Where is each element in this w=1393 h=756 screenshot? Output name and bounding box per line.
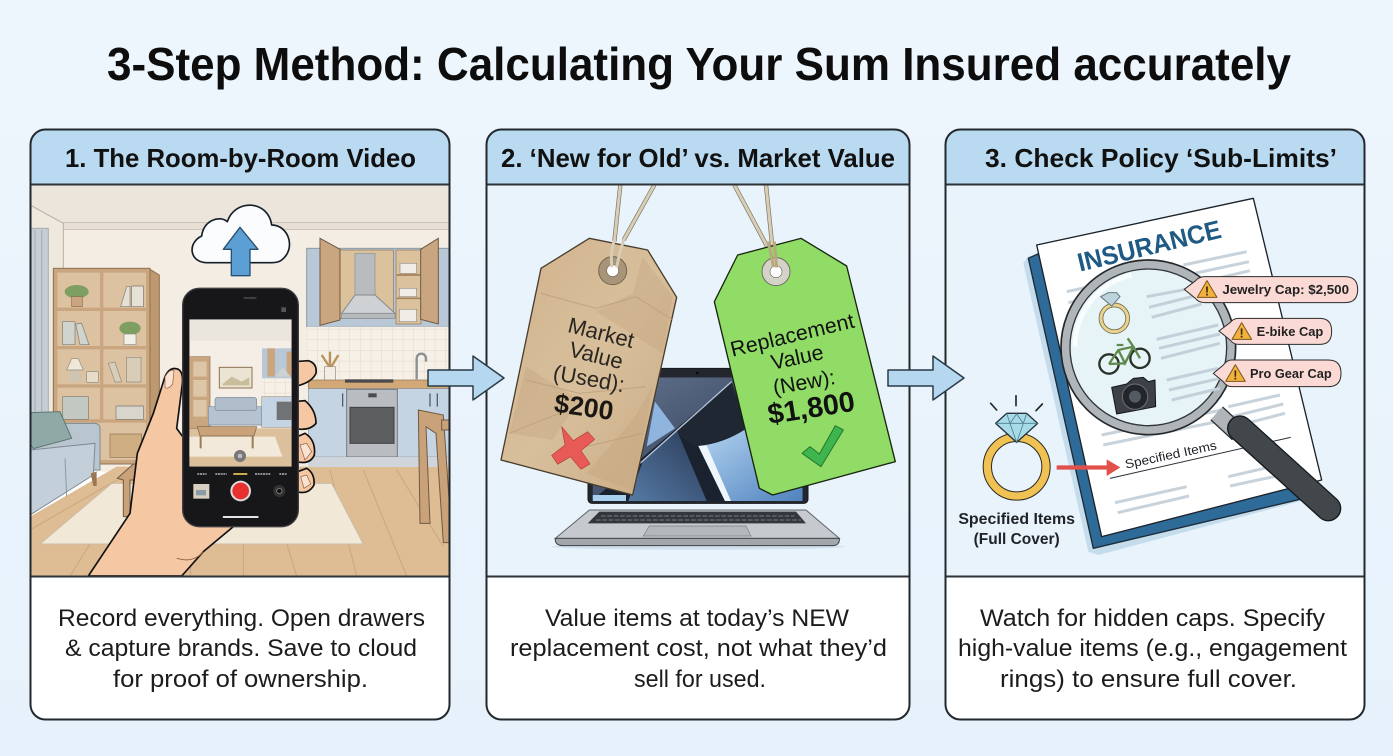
tag text: replacement value: Value bbox=[769, 340, 826, 375]
callout: pro gear cap: Pro Gear Cap bbox=[1250, 366, 1332, 381]
dining chair bbox=[418, 410, 450, 543]
icon: green check bbox=[802, 426, 843, 467]
body text: step 2: replacement cost, not what they’d bbox=[510, 635, 887, 662]
replacement value tag bbox=[714, 238, 895, 495]
record button bbox=[230, 481, 251, 501]
tag text: market value bbox=[551, 312, 637, 426]
bookshelf bbox=[53, 268, 159, 464]
policy document: INSURANCE bbox=[1074, 214, 1224, 277]
title: 3-Step Method: Calculating Your Sum Insured accurately bbox=[107, 38, 1291, 90]
heading: step 3 bbox=[945, 129, 1365, 184]
tag text: replacement value: (New): bbox=[771, 365, 837, 400]
callout: e-bike cap bbox=[1219, 318, 1332, 344]
side table bbox=[116, 464, 136, 518]
body text: step 2: Value items at today’s NEW bbox=[545, 605, 849, 632]
tag text: market value: (Used): bbox=[551, 360, 627, 397]
illustration: price tags over laptop bbox=[487, 185, 909, 576]
hand holding phone bbox=[88, 361, 316, 576]
room background bbox=[30, 185, 450, 576]
panel: step 1 room-by-room video bbox=[30, 129, 450, 720]
icon: camera in lens bbox=[1112, 377, 1156, 414]
smartphone bbox=[183, 288, 298, 527]
arrow: ring to specified items bbox=[1057, 459, 1120, 476]
arrow: step 2 to step 3 bbox=[888, 356, 964, 400]
body text: step 3: high-value items (e.g., engagement bbox=[958, 635, 1347, 662]
callout: e-bike cap: ! bbox=[1240, 326, 1244, 340]
kitchen bbox=[307, 238, 450, 467]
tag text: market value: Value bbox=[567, 337, 626, 374]
body text: step 3 bbox=[958, 605, 1347, 693]
label: specified items full cover: Specified Items bbox=[958, 511, 1075, 528]
heading: step 1 bbox=[30, 129, 450, 184]
body text: step 2 bbox=[510, 605, 887, 693]
policy document bbox=[1037, 198, 1322, 537]
laptop wallpaper bbox=[593, 377, 803, 501]
sofa bbox=[30, 412, 100, 515]
gallery thumbnail bbox=[193, 484, 209, 499]
illustration: living room and kitchen filmed by phone bbox=[30, 185, 450, 576]
arrow: step 1 to step 2 bbox=[428, 356, 504, 400]
heading: step 2 bbox=[486, 129, 910, 184]
panel: step 3 check policy sub-limits bbox=[945, 129, 1365, 720]
icon: diamond ring bbox=[987, 396, 1046, 496]
tag text: replacement value: Replacement bbox=[728, 309, 857, 362]
heading: step 3: 3. Check Policy ‘Sub-Limits’ bbox=[985, 143, 1337, 173]
flip camera button bbox=[273, 485, 285, 497]
body text: step 3: rings) to ensure full cover. bbox=[1000, 666, 1297, 693]
heading: step 2: 2. ‘New for Old’ vs. Market Value bbox=[501, 143, 895, 173]
label: specified items full cover: (Full Cover) bbox=[974, 531, 1060, 548]
callout: e-bike cap: E-bike Cap bbox=[1257, 324, 1323, 339]
callout: pro gear cap bbox=[1213, 360, 1341, 387]
panel: step 2 new for old vs market value bbox=[486, 129, 910, 720]
rug bbox=[40, 483, 363, 544]
laptop bbox=[551, 368, 844, 550]
magnifying glass bbox=[1061, 260, 1328, 508]
green tag string bbox=[734, 185, 773, 257]
icon: red cross bbox=[552, 427, 595, 469]
body text: step 1: for proof of ownership. bbox=[113, 666, 368, 693]
policy folder bbox=[1023, 255, 1305, 555]
market value tag bbox=[501, 238, 677, 495]
tag text: replacement value: $1,800 bbox=[765, 386, 857, 431]
body text: step 1 bbox=[58, 605, 425, 693]
tag text: market value: Market bbox=[566, 312, 637, 353]
callout: jewelry cap: Jewelry Cap: $2,500 bbox=[1222, 282, 1349, 297]
icon: e-bike in lens bbox=[1099, 338, 1150, 374]
camera viewfinder bbox=[189, 319, 292, 467]
body text: step 3: Watch for hidden caps. Specify bbox=[980, 605, 1325, 632]
body text: step 2: sell for used. bbox=[634, 666, 766, 693]
body text: step 1: & capture brands. Save to cloud bbox=[65, 635, 417, 662]
specified items line bbox=[1110, 437, 1291, 478]
callout: jewelry cap bbox=[1184, 277, 1358, 303]
tan tag string bbox=[614, 185, 654, 242]
body text: step 1: Record everything. Open drawers bbox=[58, 605, 425, 632]
icon: ring in lens bbox=[1101, 293, 1128, 332]
tag text: market value: $200 bbox=[552, 388, 615, 426]
specified items line: Specified Items bbox=[1124, 438, 1218, 472]
illustration: insurance policy under magnifier bbox=[946, 185, 1364, 576]
callout: jewelry cap: ! bbox=[1205, 284, 1209, 298]
icon: cloud upload bbox=[192, 205, 289, 276]
label: specified items full cover bbox=[958, 511, 1075, 548]
heading: step 1: 1. The Room-by-Room Video bbox=[65, 143, 416, 173]
callout: pro gear cap: ! bbox=[1233, 368, 1237, 382]
camera mode strip bbox=[197, 473, 287, 475]
tag text: replacement value bbox=[728, 309, 857, 431]
